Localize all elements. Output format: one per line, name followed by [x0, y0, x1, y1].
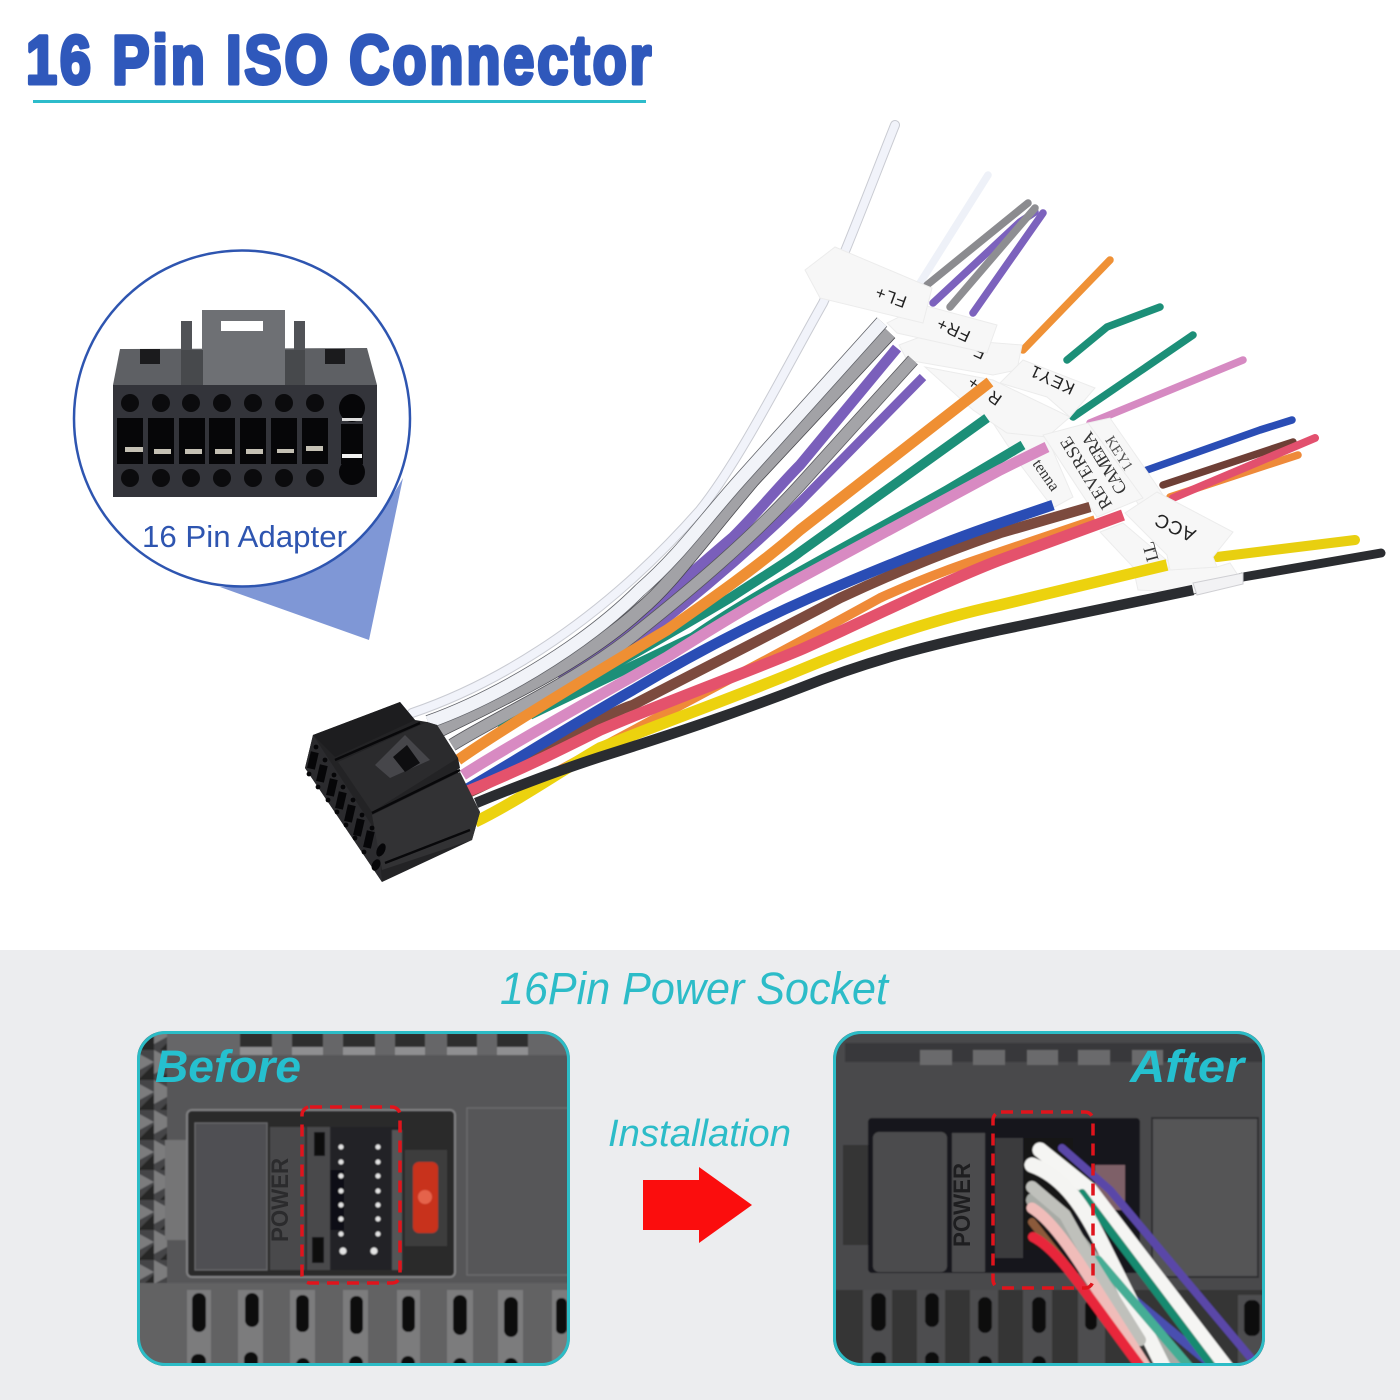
wire: white two	[428, 322, 882, 722]
adapter label: 16 Pin Adapter	[142, 519, 347, 554]
arrow: installation	[643, 1167, 752, 1243]
thick wire bundle	[428, 322, 1193, 822]
tape: KEY1	[1000, 360, 1095, 417]
before frame	[138, 1032, 568, 1364]
before highlight box	[302, 1107, 400, 1283]
tape: F: F	[970, 341, 989, 363]
grooves	[335, 723, 470, 863]
adapter latch tab	[140, 310, 345, 385]
title: 16 Pin ISO Connector	[26, 22, 651, 99]
panel background	[0, 950, 1400, 1400]
adapter body	[113, 385, 377, 497]
pin cavities	[307, 745, 388, 872]
adapter upper pin holes	[121, 394, 324, 487]
tape: F	[899, 337, 1022, 375]
after photo: POWER	[949, 1163, 976, 1247]
tape: RR+	[925, 367, 1070, 437]
wire label tapes	[805, 247, 1243, 595]
wire: orange two	[560, 520, 1095, 770]
after highlight box	[993, 1112, 1093, 1288]
tape: FR+: FR+	[933, 313, 973, 346]
tape: REVERSE CAMERA	[1043, 423, 1143, 517]
tape: LL	[1100, 523, 1243, 593]
wire: red	[466, 515, 1123, 792]
main black connector	[305, 702, 480, 882]
wire: brown	[470, 507, 1090, 792]
wire: gray two	[452, 360, 913, 745]
tape: REVERSE CAMERA: CAMERA	[1077, 428, 1131, 498]
tape: RR+: R +	[963, 372, 1005, 409]
tape: KEY	[1088, 418, 1163, 507]
wire: green two	[530, 445, 1023, 715]
wire: black	[476, 590, 1193, 803]
tape: FR+	[887, 305, 997, 353]
wire: purple two	[600, 377, 923, 670]
latch window	[393, 745, 420, 772]
adapter top plate	[113, 348, 377, 385]
tape: Antenna	[993, 423, 1073, 508]
connector top face	[313, 702, 415, 757]
tape: ACC: ACC	[1151, 508, 1199, 545]
wire tips	[920, 175, 1381, 590]
after frame	[834, 1032, 1264, 1364]
tape: FL+	[805, 247, 932, 323]
adapter pin slots	[117, 394, 365, 485]
before photo	[137, 1031, 570, 1378]
wire: green one	[500, 418, 987, 730]
connector front face	[305, 735, 382, 882]
callout pointer wedge	[220, 478, 403, 640]
panel heading: 16Pin Power Socket	[500, 963, 890, 1014]
connector lower shell	[372, 772, 480, 870]
adapter pin contacts	[125, 418, 362, 458]
wire: blue	[465, 505, 1053, 790]
tape: LL: LL	[1138, 539, 1162, 564]
after photo	[833, 1031, 1265, 1380]
tape: KEY: KEY1	[1101, 433, 1136, 474]
wire: purple one	[560, 348, 897, 680]
bottom panel: power socket	[0, 950, 1400, 1400]
before label: Before	[155, 1041, 301, 1092]
before photo: POWER	[267, 1158, 294, 1242]
installation label: Installation	[608, 1113, 791, 1155]
connector mid shell	[338, 722, 458, 812]
connector body	[305, 702, 480, 882]
wire: pink	[463, 447, 1047, 775]
wire: orange	[458, 382, 990, 760]
latch	[375, 735, 430, 778]
tape: FL+: FL+	[872, 282, 909, 311]
after label: After	[1129, 1041, 1247, 1092]
tape: Antenna: tenna	[1029, 456, 1063, 494]
callout circle	[74, 250, 410, 586]
title underline	[33, 100, 646, 103]
wire: gray one	[440, 333, 890, 730]
wiring harness tips	[412, 125, 1381, 713]
adapter callout	[74, 250, 410, 640]
tape: KEY1: KEY1	[1027, 361, 1078, 398]
black wire sleeve	[1193, 573, 1243, 595]
tape: ACC	[1125, 492, 1233, 570]
tape: REVERSE CAMERA: REVERSE	[1056, 433, 1116, 513]
wire: yellow	[475, 565, 1167, 822]
wire: white one	[412, 125, 895, 713]
